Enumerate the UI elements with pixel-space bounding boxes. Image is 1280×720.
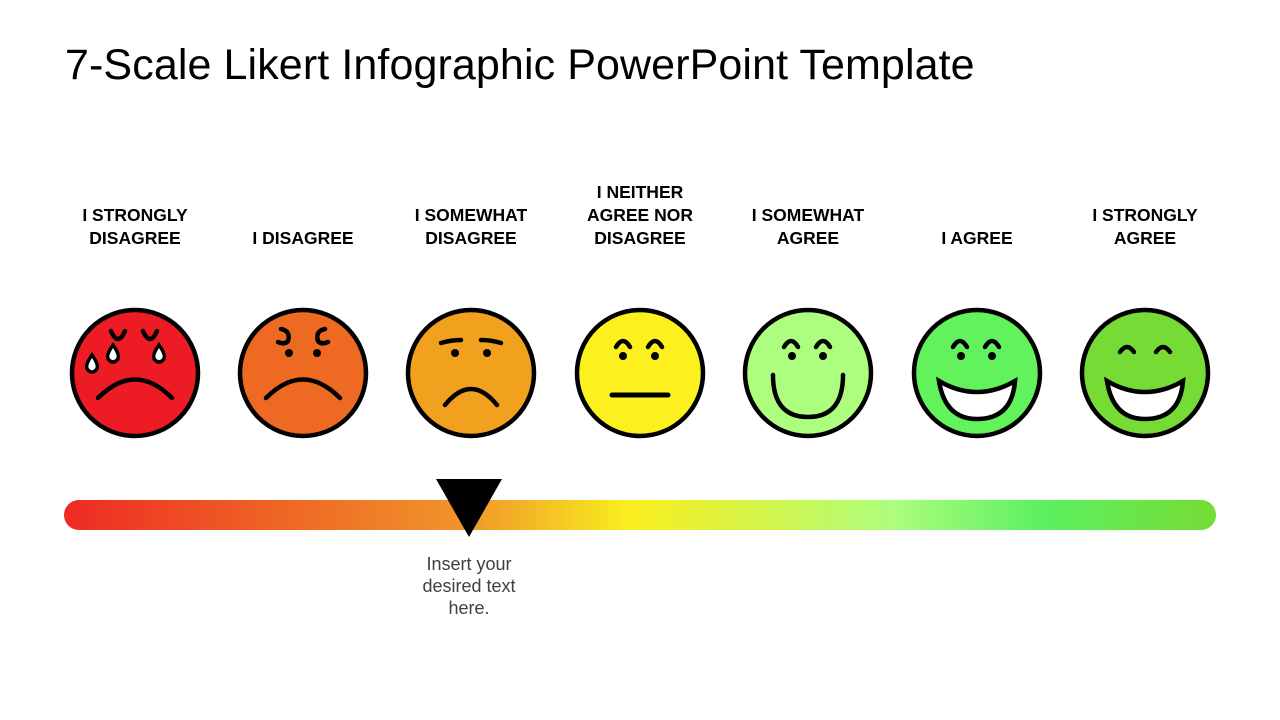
label 6: I AGREE [941, 228, 1013, 248]
label 1 [82, 205, 188, 248]
label 5 [752, 205, 864, 248]
label 1: DISAGREE [89, 228, 181, 248]
label 7 [1092, 205, 1198, 248]
gradient scale bar [64, 500, 1216, 530]
face 2: sad [240, 310, 366, 436]
label 5: I SOMEWHAT [752, 205, 864, 225]
pointer note: here. [448, 598, 490, 618]
face 7: laughing [1082, 310, 1208, 436]
label 4: AGREE NOR [587, 205, 693, 225]
label 4: DISAGREE [594, 228, 686, 248]
label 4: I NEITHER [597, 182, 683, 202]
label 2: I DISAGREE [252, 228, 354, 248]
label 7: AGREE [1114, 228, 1176, 248]
pointer triangle [436, 479, 502, 537]
face 1: crying [72, 310, 198, 436]
face 6: big smile [914, 310, 1040, 436]
pointer note: Insert your [426, 554, 512, 574]
label 4 [587, 182, 693, 248]
label 5: AGREE [777, 228, 839, 248]
pointer note: desired text [422, 576, 516, 596]
label 3: I SOMEWHAT [415, 205, 527, 225]
title: 7-Scale Likert Infographic PowerPoint Template [65, 41, 975, 89]
label 3: DISAGREE [425, 228, 517, 248]
label 1: I STRONGLY [82, 205, 188, 225]
label 3 [415, 205, 527, 248]
face 4: neutral [577, 310, 703, 436]
face 3: somewhat sad [408, 310, 534, 436]
label 7: I STRONGLY [1092, 205, 1198, 225]
face 5: smile [745, 310, 871, 436]
pointer note [422, 554, 516, 618]
